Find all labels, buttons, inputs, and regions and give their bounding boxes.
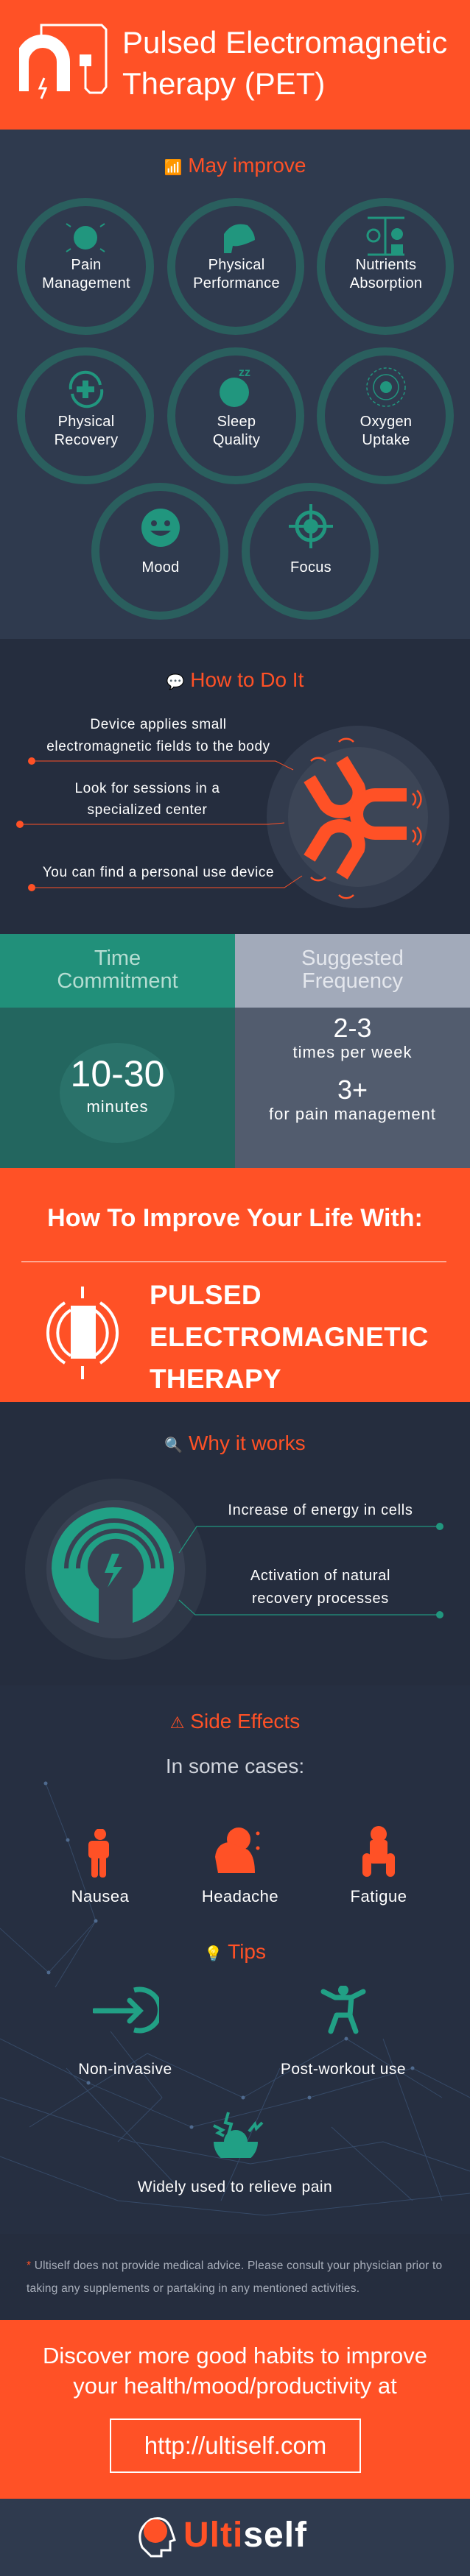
panel: suggested frequency [235,934,470,1168]
item: physical performance: Performance [193,275,280,291]
connector lines [178,1523,443,1618]
banner: how to improve [0,1168,470,1402]
panel: suggested frequency: Frequency [302,969,403,993]
point 1: electromagnetic fields to the body [46,739,270,754]
panel: suggested frequency: for pain management [269,1105,436,1123]
logo [138,2516,307,2557]
item: pain management: Management [42,275,130,291]
text: increase of energy: Increase of energy in cells [228,1502,413,1518]
icon: headache [215,1827,259,1873]
text: Fatigue [351,1887,407,1906]
item: physical performance: Physical [208,257,264,273]
tip: post-workout [321,1986,365,2034]
item: pain management: Pain [71,257,102,273]
item: nutrients absorption: Nutrients [356,257,416,273]
item: sleep quality [167,347,304,484]
heading: why it works: 🔍 Why it works [164,1432,306,1454]
panel: suggested frequency: times per week [293,1043,412,1061]
item: focus [242,483,379,620]
title: pulsed electromagnetic therapy: ELECTROMAGNETIC [150,1322,429,1352]
item: nutrients absorption: Absorption [350,275,422,291]
labels: side effects: Nausea [71,1887,129,1906]
title [122,25,447,101]
button: url: http://ultiself.com [144,2432,326,2459]
panel: time commitment: minutes [86,1097,149,1116]
panel: suggested frequency: Suggested [301,946,404,970]
point 1 [46,717,270,754]
item: pain management [17,198,154,335]
heading: side effects: ⚠ Side Effects [170,1710,300,1733]
heading: how to do it: 💬 How to Do It [166,668,304,691]
item: focus: Focus [290,559,332,576]
disclaimer: * Ultiself does not provide medical advice. Please consult your physician prior to taking any supplements or partaking in any mentioned activities. [27,2260,442,2295]
item: physical recovery: Physical [58,414,114,430]
item: physical recovery [17,347,154,484]
panel: time commitment: Commitment [57,969,178,993]
tip: non-invasive [93,1987,159,2033]
item: nutrients absorption [317,198,454,335]
item: sleep quality: Quality [213,432,260,448]
point 1: Device applies small [90,717,227,732]
icon: fatigue [362,1826,395,1877]
title: Pulsed Electromagnetic [122,25,447,60]
item: sleep quality: zz [239,367,250,379]
panel: time commitment: Time [94,946,141,970]
value: 3+ for pain management: 3+ [337,1075,368,1105]
item: oxygen uptake: Oxygen [360,414,412,430]
point 2: Look for sessions in a [75,781,220,796]
text: Widely used to relieve pain [138,2179,332,2195]
button: url [110,2418,361,2473]
heading: may improve: 📶 May improve [164,154,306,177]
tip: relieve pain [213,2112,264,2158]
item: mood: Mood [141,559,180,576]
logo: Ultiself [183,2516,307,2555]
item: sleep quality: Sleep [217,414,256,430]
title: pulsed electromagnetic therapy [150,1280,429,1394]
magnets illustration [267,726,449,908]
item: mood [91,483,228,620]
item: physical recovery: Recovery [55,432,118,448]
connector lines [16,757,302,891]
call to action: Discover more good habits to improve [43,2343,427,2368]
point 3: You can find a personal use device [43,865,274,880]
subheading: In some cases: [166,1755,304,1777]
background network [0,1781,470,2215]
text: activation of recovery: recovery processes [252,1590,389,1607]
panel: how to do it [0,639,470,934]
title: pulsed electromagnetic therapy: PULSED [150,1280,262,1310]
icon: energy gauge [25,1479,206,1660]
icon: electromagnet [46,1287,119,1379]
header [0,0,470,130]
item: physical performance [167,198,304,335]
point 2: specialized center [88,802,207,818]
text: Headache [202,1887,278,1906]
value: 10-30 minutes: 10-30 [71,1053,164,1094]
title: Therapy (PET) [122,66,325,101]
heading: tips: 💡 Tips [204,1940,266,1963]
text: activation of recovery [250,1568,390,1607]
icon: nausea [88,1829,109,1878]
panel: time commitment [0,934,235,1168]
clock icon background [60,1043,175,1143]
item: oxygen uptake: Uptake [362,432,410,448]
text: Post-workout use [281,2061,406,2078]
text: Non-invasive [78,2061,172,2078]
value: 2-3 times per week: 2-3 [333,1013,372,1043]
call to action: your health/mood/productivity at [73,2373,397,2399]
icon: magnet and plug [19,24,108,99]
text: activation of recovery: Activation of natural [250,1568,390,1584]
point 2 [75,781,220,818]
title: pulsed electromagnetic therapy: THERAPY [150,1364,281,1394]
footer [0,2499,470,2576]
call to action [0,2320,470,2499]
banner: how to improve: How To Improve Your Life With: [47,1204,423,1232]
panel: may improve [0,130,470,639]
item: oxygen uptake [317,347,454,484]
